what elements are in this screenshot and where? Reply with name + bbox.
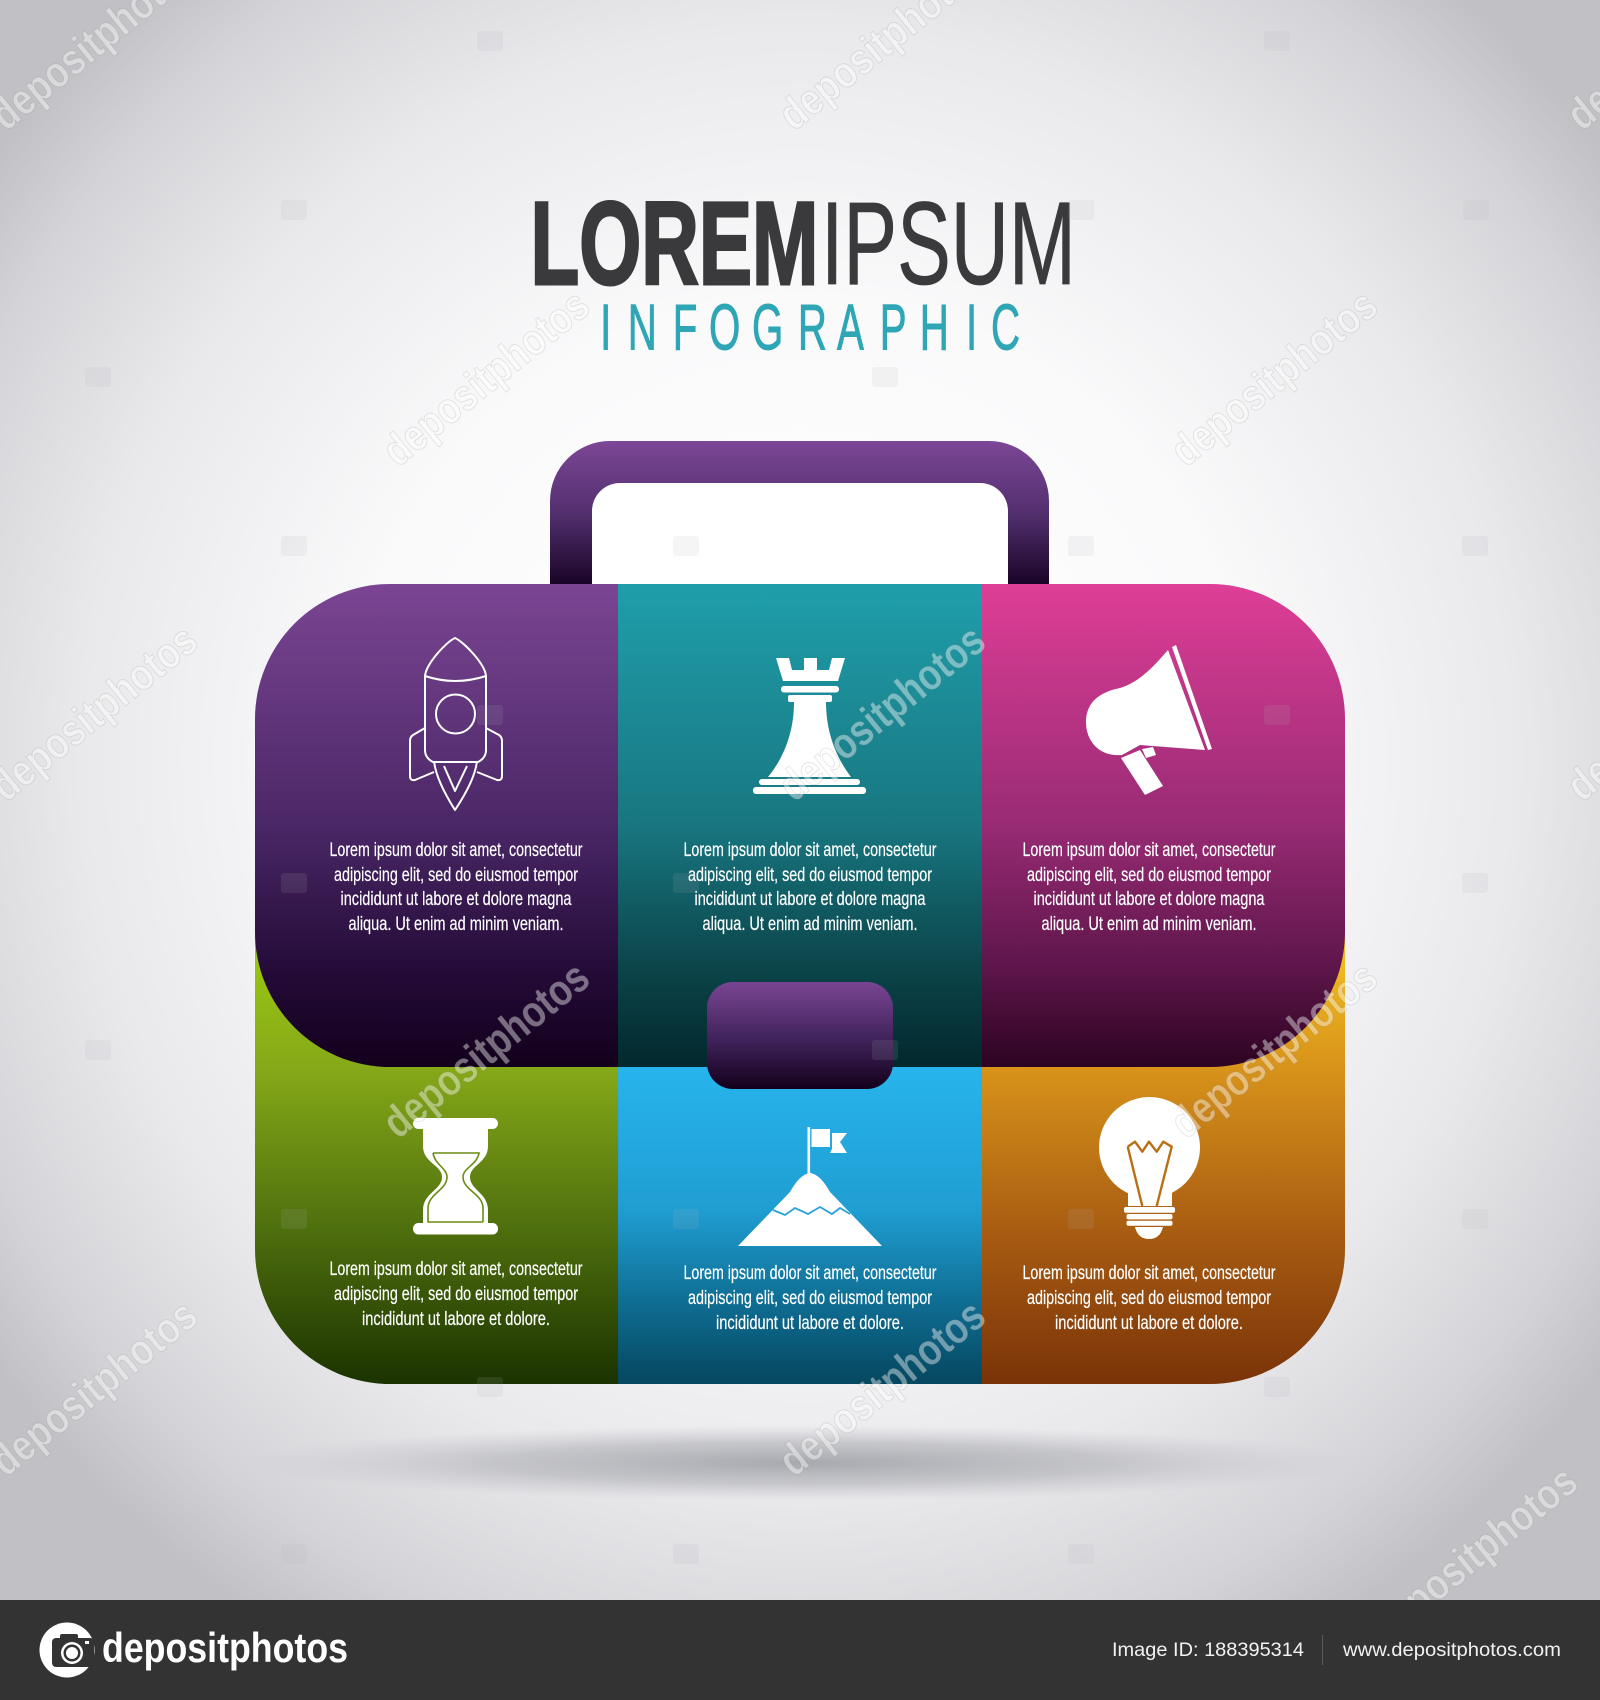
text: purple panel: Lorem ipsum dolor sit amet, consectetur xyxy=(330,840,583,861)
text: pink panel: adipiscing elit, sed do eiusmod tempor xyxy=(1027,865,1271,886)
heading: lorem ipsum: IPSUM xyxy=(821,178,1076,310)
footer bar xyxy=(0,1600,1600,1700)
watermark camera marks xyxy=(85,31,1489,1564)
text: teal panel: incididunt ut labore et dolore magna xyxy=(694,889,926,910)
handle xyxy=(550,441,1049,584)
watermark text: depositphotos xyxy=(769,615,995,811)
website url: www.depositphotos.com xyxy=(1342,1639,1561,1661)
logo wordmark: depositphotos xyxy=(102,1624,348,1671)
watermark text: depositphotos xyxy=(373,280,599,476)
clasp xyxy=(707,982,893,1089)
title xyxy=(530,178,1076,364)
text: teal panel xyxy=(684,840,937,935)
watermark text: depositphotos xyxy=(769,1290,995,1486)
text: teal panel: aliqua. Ut enim ad minim veniam. xyxy=(702,914,918,935)
icon: hourglass xyxy=(413,1118,498,1234)
briefcase xyxy=(255,441,1345,1384)
watermark text: depositphotos xyxy=(1161,280,1387,476)
text: pink panel: aliqua. Ut enim ad minim veniam. xyxy=(1042,914,1256,935)
icon: chess rook xyxy=(753,658,866,794)
icon: mountain with flag xyxy=(738,1127,882,1246)
icon: light bulb xyxy=(1099,1097,1200,1239)
text: teal panel: adipiscing elit, sed do eiusmod tempor xyxy=(688,865,932,886)
text: blue panel: adipiscing elit, sed do eiusmod tempor xyxy=(688,1288,932,1309)
text: purple panel: incididunt ut labore et dolore magna xyxy=(340,889,572,910)
text: green panel: adipiscing elit, sed do eiusmod tempor xyxy=(334,1284,578,1305)
panel: teal upper centre xyxy=(618,584,982,1067)
icon: megaphone xyxy=(1086,645,1212,795)
panel: purple upper left xyxy=(255,584,618,1067)
text: pink panel: Lorem ipsum dolor sit amet, consectetur xyxy=(1022,840,1276,861)
heading: lorem ipsum: LOREM xyxy=(530,178,818,310)
text: pink panel xyxy=(1022,840,1276,935)
text: orange panel: adipiscing elit, sed do eiusmod tempor xyxy=(1027,1288,1271,1309)
subheading: infographic: INFOGRAPHIC xyxy=(600,292,1020,364)
panel: pink upper right xyxy=(982,584,1345,1067)
text: orange panel: Lorem ipsum dolor sit amet, consectetur xyxy=(1022,1263,1276,1284)
text: teal panel: Lorem ipsum dolor sit amet, consectetur xyxy=(684,840,937,861)
text: pink panel: incididunt ut labore et dolore magna xyxy=(1034,889,1265,910)
text: green panel: Lorem ipsum dolor sit amet, consectetur xyxy=(330,1259,583,1280)
panel: blue lower centre xyxy=(618,1067,982,1384)
text: green panel: incididunt ut labore et dolore. xyxy=(362,1309,550,1330)
text: purple panel: adipiscing elit, sed do eiusmod tempor xyxy=(334,865,578,886)
text: orange panel xyxy=(1022,1263,1276,1334)
text: orange panel: incididunt ut labore et dolore. xyxy=(1055,1313,1243,1334)
icon: camera logo xyxy=(40,1622,94,1678)
panel: green lower left xyxy=(255,900,618,1384)
ground shadow xyxy=(242,1425,1362,1501)
image id: Image ID: 188395314 xyxy=(1112,1639,1304,1661)
text: blue panel: Lorem ipsum dolor sit amet, consectetur xyxy=(684,1263,937,1284)
watermark text: depositphotos xyxy=(1161,952,1387,1148)
text: green panel xyxy=(330,1259,583,1330)
text: blue panel: incididunt ut labore et dolore. xyxy=(716,1313,904,1334)
panel: orange lower right xyxy=(982,900,1345,1384)
text: blue panel xyxy=(684,1263,937,1334)
text: purple panel xyxy=(330,840,583,935)
watermark text: depositphotos xyxy=(373,952,599,1148)
icon: rocket xyxy=(410,638,502,810)
text: purple panel: aliqua. Ut enim ad minim veniam. xyxy=(348,914,564,935)
